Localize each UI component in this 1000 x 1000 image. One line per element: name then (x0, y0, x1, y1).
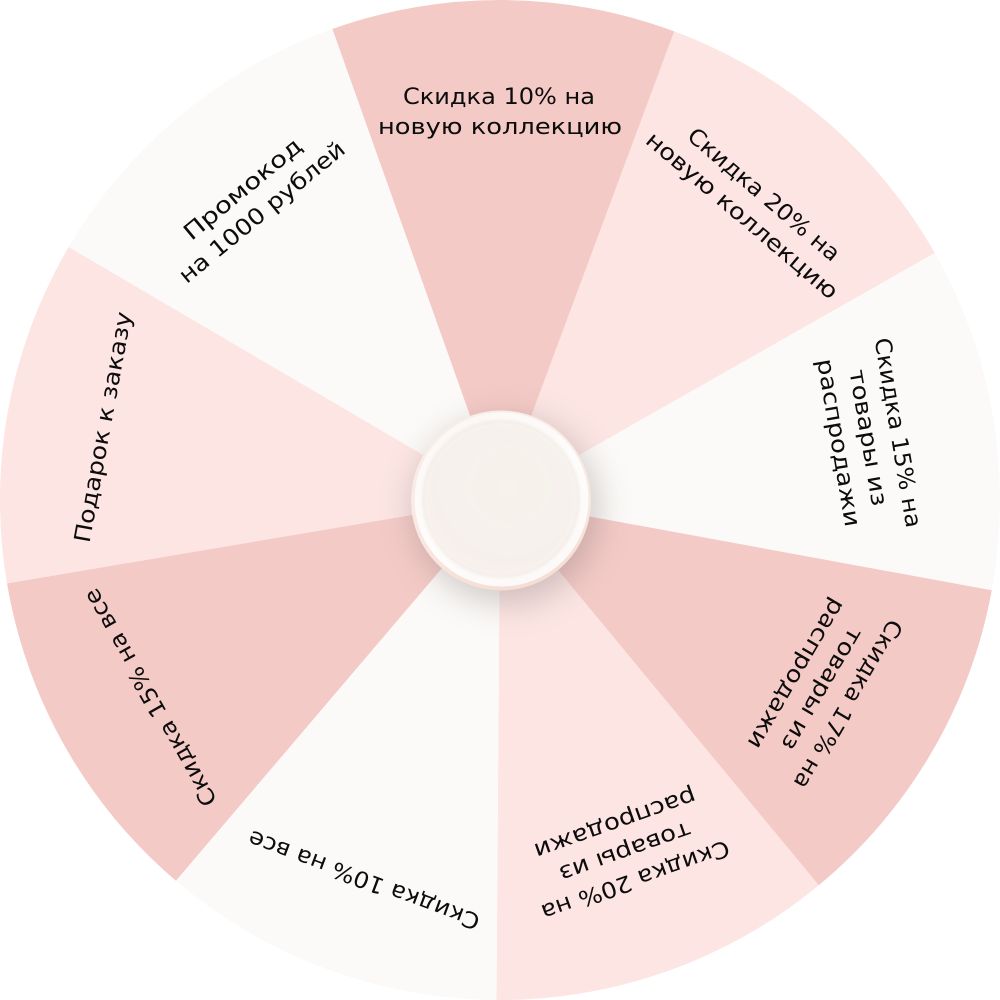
label: 10% everything: Скидка 10% на все (245, 825, 484, 934)
wedge: 17% sale items (500, 500, 992, 885)
label: 20% new collection: Скидка 20% на (682, 123, 845, 267)
label: 20% new collection (640, 104, 863, 305)
label: 15% sale items (809, 336, 926, 540)
label: 15% sale items: Скидка 15% на (869, 336, 926, 530)
wedge: gift with order (0, 247, 500, 583)
wedge: promo code (69, 29, 500, 500)
label: 15% everything: Скидка 15% на все (79, 584, 223, 811)
label: 20% new collection: новую коллекцию (640, 127, 843, 305)
label: 17% sale items: Скидка 17% на (788, 615, 907, 793)
wedge: 20% sale items (496, 500, 819, 1000)
label: 20% sale items: товары из (556, 816, 694, 887)
label: promo code (155, 113, 351, 289)
label: promo code: Промокод (179, 133, 308, 246)
label: 10% new collection (378, 84, 622, 140)
label: 15% sale items: товары из (843, 368, 892, 508)
label: promo code: на 1000 рублей (174, 136, 351, 289)
label: 17% sale items: товары из (776, 623, 868, 755)
label: 10% new collection: Скидка 10% на (403, 84, 595, 110)
label: 20% sale items: Скидка 20% на (538, 834, 733, 925)
label: 20% sale items: распродажи (531, 782, 699, 864)
wedge: 15% sale items (500, 253, 1000, 590)
wedge: 15% everything (7, 500, 500, 881)
label: 10% new collection: новую коллекцию (378, 114, 622, 140)
wedge: 10% new collection (332, 0, 674, 500)
label: gift with order: Подарок к заказу (70, 310, 138, 545)
label: 20% sale items (517, 778, 733, 925)
wedge: 20% new collection (500, 31, 935, 500)
label: 17% sale items (736, 584, 907, 793)
label: 17% sale items: распродажи (742, 594, 850, 753)
center hub (411, 410, 598, 602)
label: 15% sale items: распродажи (811, 357, 865, 529)
wedge: 10% everything (176, 500, 500, 1000)
